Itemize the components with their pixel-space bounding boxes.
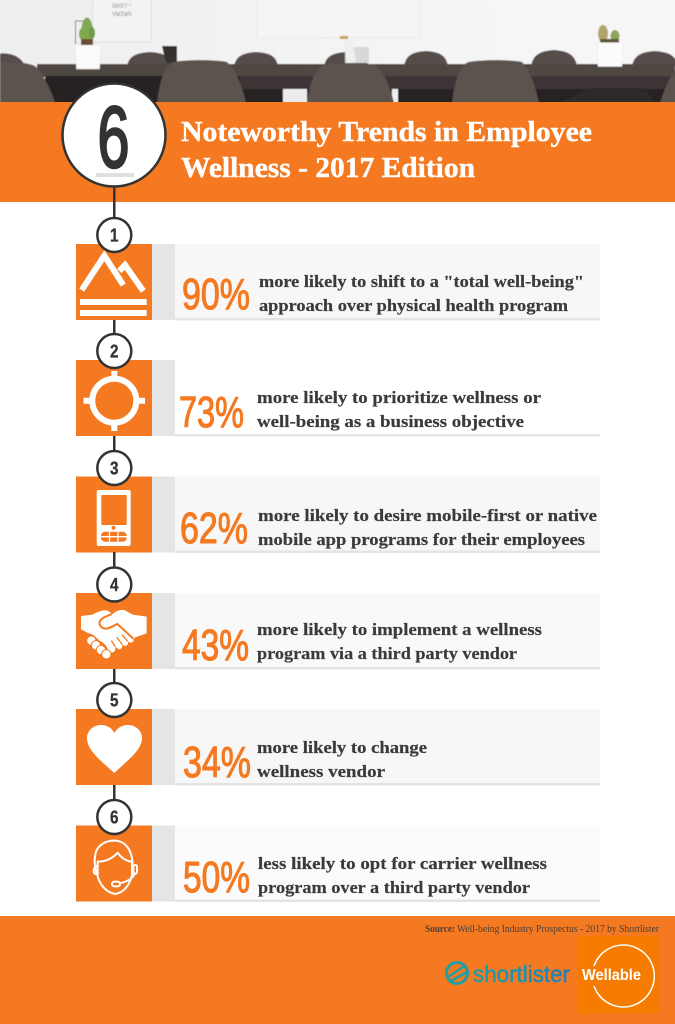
badge: 5 (97, 683, 131, 717)
text: item 3: more likely to desire mobile-first or native (258, 506, 598, 525)
plant right (597, 25, 623, 66)
source line: Source: (425, 924, 455, 935)
badge: 1 (97, 218, 131, 252)
item 6 (76, 785, 600, 902)
text: item 6: program over a third party vendor (258, 878, 530, 897)
percent: 34%: 34% (183, 738, 251, 787)
back row chairs (0, 50, 675, 66)
text: item 2: more likely to prioritize wellness or (257, 388, 541, 407)
icon: heart (87, 725, 142, 773)
text: item 6: less likely to opt for carrier wellness (258, 854, 547, 873)
title: Wellness - 2017 Edition (181, 152, 475, 184)
percent: 50%: 50% (183, 853, 250, 902)
icon: handshake (81, 610, 147, 659)
text: item 3: mobile app programs for their employees (258, 530, 585, 549)
percent: 90%: 90% (182, 270, 250, 319)
badge: 1: 1 (110, 226, 118, 246)
icon: mountains (80, 256, 147, 313)
wall poster: GHST° (112, 2, 132, 10)
badge: 3 (97, 451, 131, 485)
text: item 5: wellness vendor (257, 762, 386, 781)
text: item 4: more likely to implement a wellness (257, 620, 542, 639)
badge: 2: 2 (110, 342, 118, 362)
table (37, 64, 675, 103)
item 1 (76, 218, 600, 320)
plant left (75, 18, 101, 69)
text: item 5: more likely to change (257, 738, 427, 757)
logo: shortlister: shortlister (473, 961, 570, 987)
dark cup (162, 46, 177, 63)
badge: 4 (97, 568, 131, 602)
badge: 5: 5 (110, 690, 118, 710)
percent: 73%: 73% (179, 388, 244, 437)
vase (340, 36, 369, 63)
whiteboard (257, 0, 420, 38)
item 5 (76, 669, 600, 787)
icon: headset operator (94, 841, 137, 894)
wall poster: VWIWS (112, 11, 132, 18)
text: item 2: well-being as a business objective (257, 412, 524, 431)
wall poster (92, 0, 152, 42)
icon: mobile phone (97, 490, 131, 546)
connector line to first item (113, 187, 116, 218)
text: item 1: approach over physical health program (259, 296, 568, 315)
photo: meeting room with table and chairs (0, 0, 675, 103)
percent: 43%: 43% (182, 621, 249, 670)
big number badge: 6 (98, 89, 130, 186)
header band (0, 102, 675, 202)
badge: 2 (97, 334, 131, 368)
text: item 1: more likely to shift to a "total well-being" (259, 272, 584, 291)
badge: 4: 4 (110, 575, 118, 595)
logo: wellable: Wellable (582, 967, 641, 984)
item 4 (76, 552, 600, 670)
badge: 6: 6 (110, 808, 118, 828)
item 2 (76, 320, 600, 437)
logo: wellable (578, 936, 658, 1014)
percent: 62%: 62% (180, 504, 248, 553)
icon: target (84, 371, 145, 431)
item 3 (76, 436, 600, 553)
source line: Well-being Industry Prospectus - 2017 by Shortlister (457, 924, 660, 935)
badge: 3: 3 (110, 458, 118, 478)
footer band (0, 916, 675, 1024)
big number badge (62, 84, 166, 186)
badge: 6 (97, 800, 131, 834)
title: Noteworthy Trends in Employee (181, 116, 592, 148)
front row chairs (0, 60, 675, 103)
text: item 4: program via a third party vendor (257, 644, 517, 663)
